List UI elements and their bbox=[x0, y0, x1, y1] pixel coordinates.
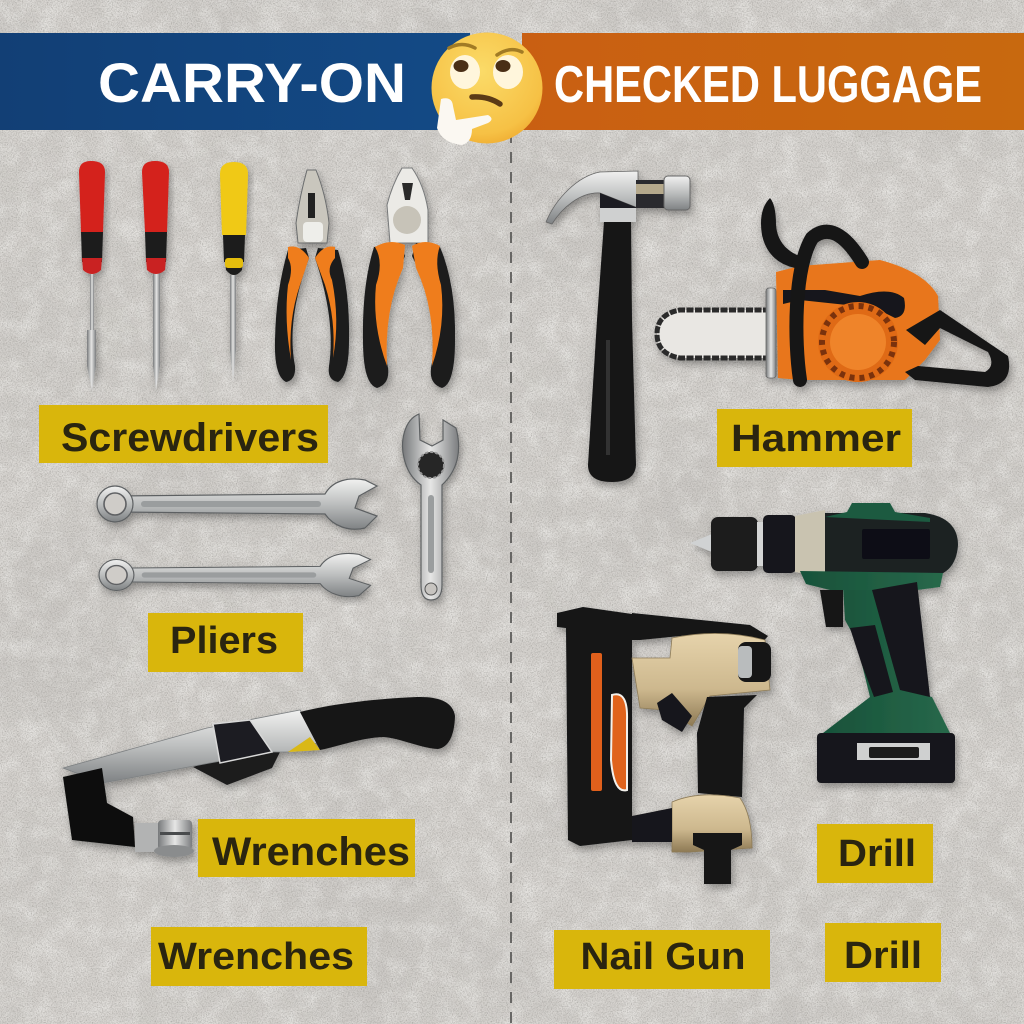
icon: thinking face emoji bbox=[432, 32, 542, 145]
label: Drill upper: Drill bbox=[838, 833, 916, 875]
label: Nail Gun: Nail Gun bbox=[580, 936, 746, 978]
header band bbox=[0, 32, 1024, 145]
icon: small pliers bbox=[275, 170, 349, 382]
label: Drill lower bbox=[825, 923, 941, 982]
panel: checked luggage tools bbox=[546, 171, 1009, 989]
label: Hammer bbox=[717, 409, 912, 467]
icon: cordless drill bbox=[690, 503, 958, 783]
icon: lower horizontal wrench bbox=[99, 553, 371, 597]
label: Drill lower: Drill bbox=[844, 935, 922, 977]
center dashed divider bbox=[510, 132, 512, 1024]
icon: vertical adjustable wrench bbox=[403, 414, 459, 600]
label: Wrenches lower: Wrenches bbox=[158, 936, 354, 978]
icon: upper horizontal wrench bbox=[97, 479, 377, 529]
icon: claw hammer bbox=[546, 171, 690, 482]
carry-on banner: CARRY-ON bbox=[98, 51, 406, 114]
label: Wrenches upper: Wrenches bbox=[212, 830, 410, 874]
label: Hammer: Hammer bbox=[731, 418, 901, 460]
label: Drill upper bbox=[817, 824, 933, 883]
label: Wrenches upper bbox=[198, 819, 415, 877]
icon: large pliers bbox=[363, 168, 455, 388]
label: Screwdrivers bbox=[39, 405, 328, 463]
icon: yellow screwdriver bbox=[220, 162, 248, 382]
icon: red screwdriver 1 bbox=[79, 161, 105, 390]
label: Pliers: Pliers bbox=[170, 620, 278, 662]
icon: red screwdriver 2 bbox=[142, 161, 169, 390]
label: Screwdrivers: Screwdrivers bbox=[61, 416, 319, 460]
icon: chainsaw bbox=[657, 198, 1009, 387]
carry-on banner bbox=[0, 33, 470, 130]
icon: ratchet tool bbox=[63, 697, 455, 857]
label: Wrenches lower bbox=[151, 927, 367, 986]
icon: nail gun bbox=[557, 607, 771, 884]
panel: carry-on tools bbox=[39, 161, 459, 986]
label: Pliers bbox=[148, 613, 303, 672]
checked luggage banner bbox=[522, 33, 1024, 130]
label: Nail Gun bbox=[554, 930, 770, 989]
